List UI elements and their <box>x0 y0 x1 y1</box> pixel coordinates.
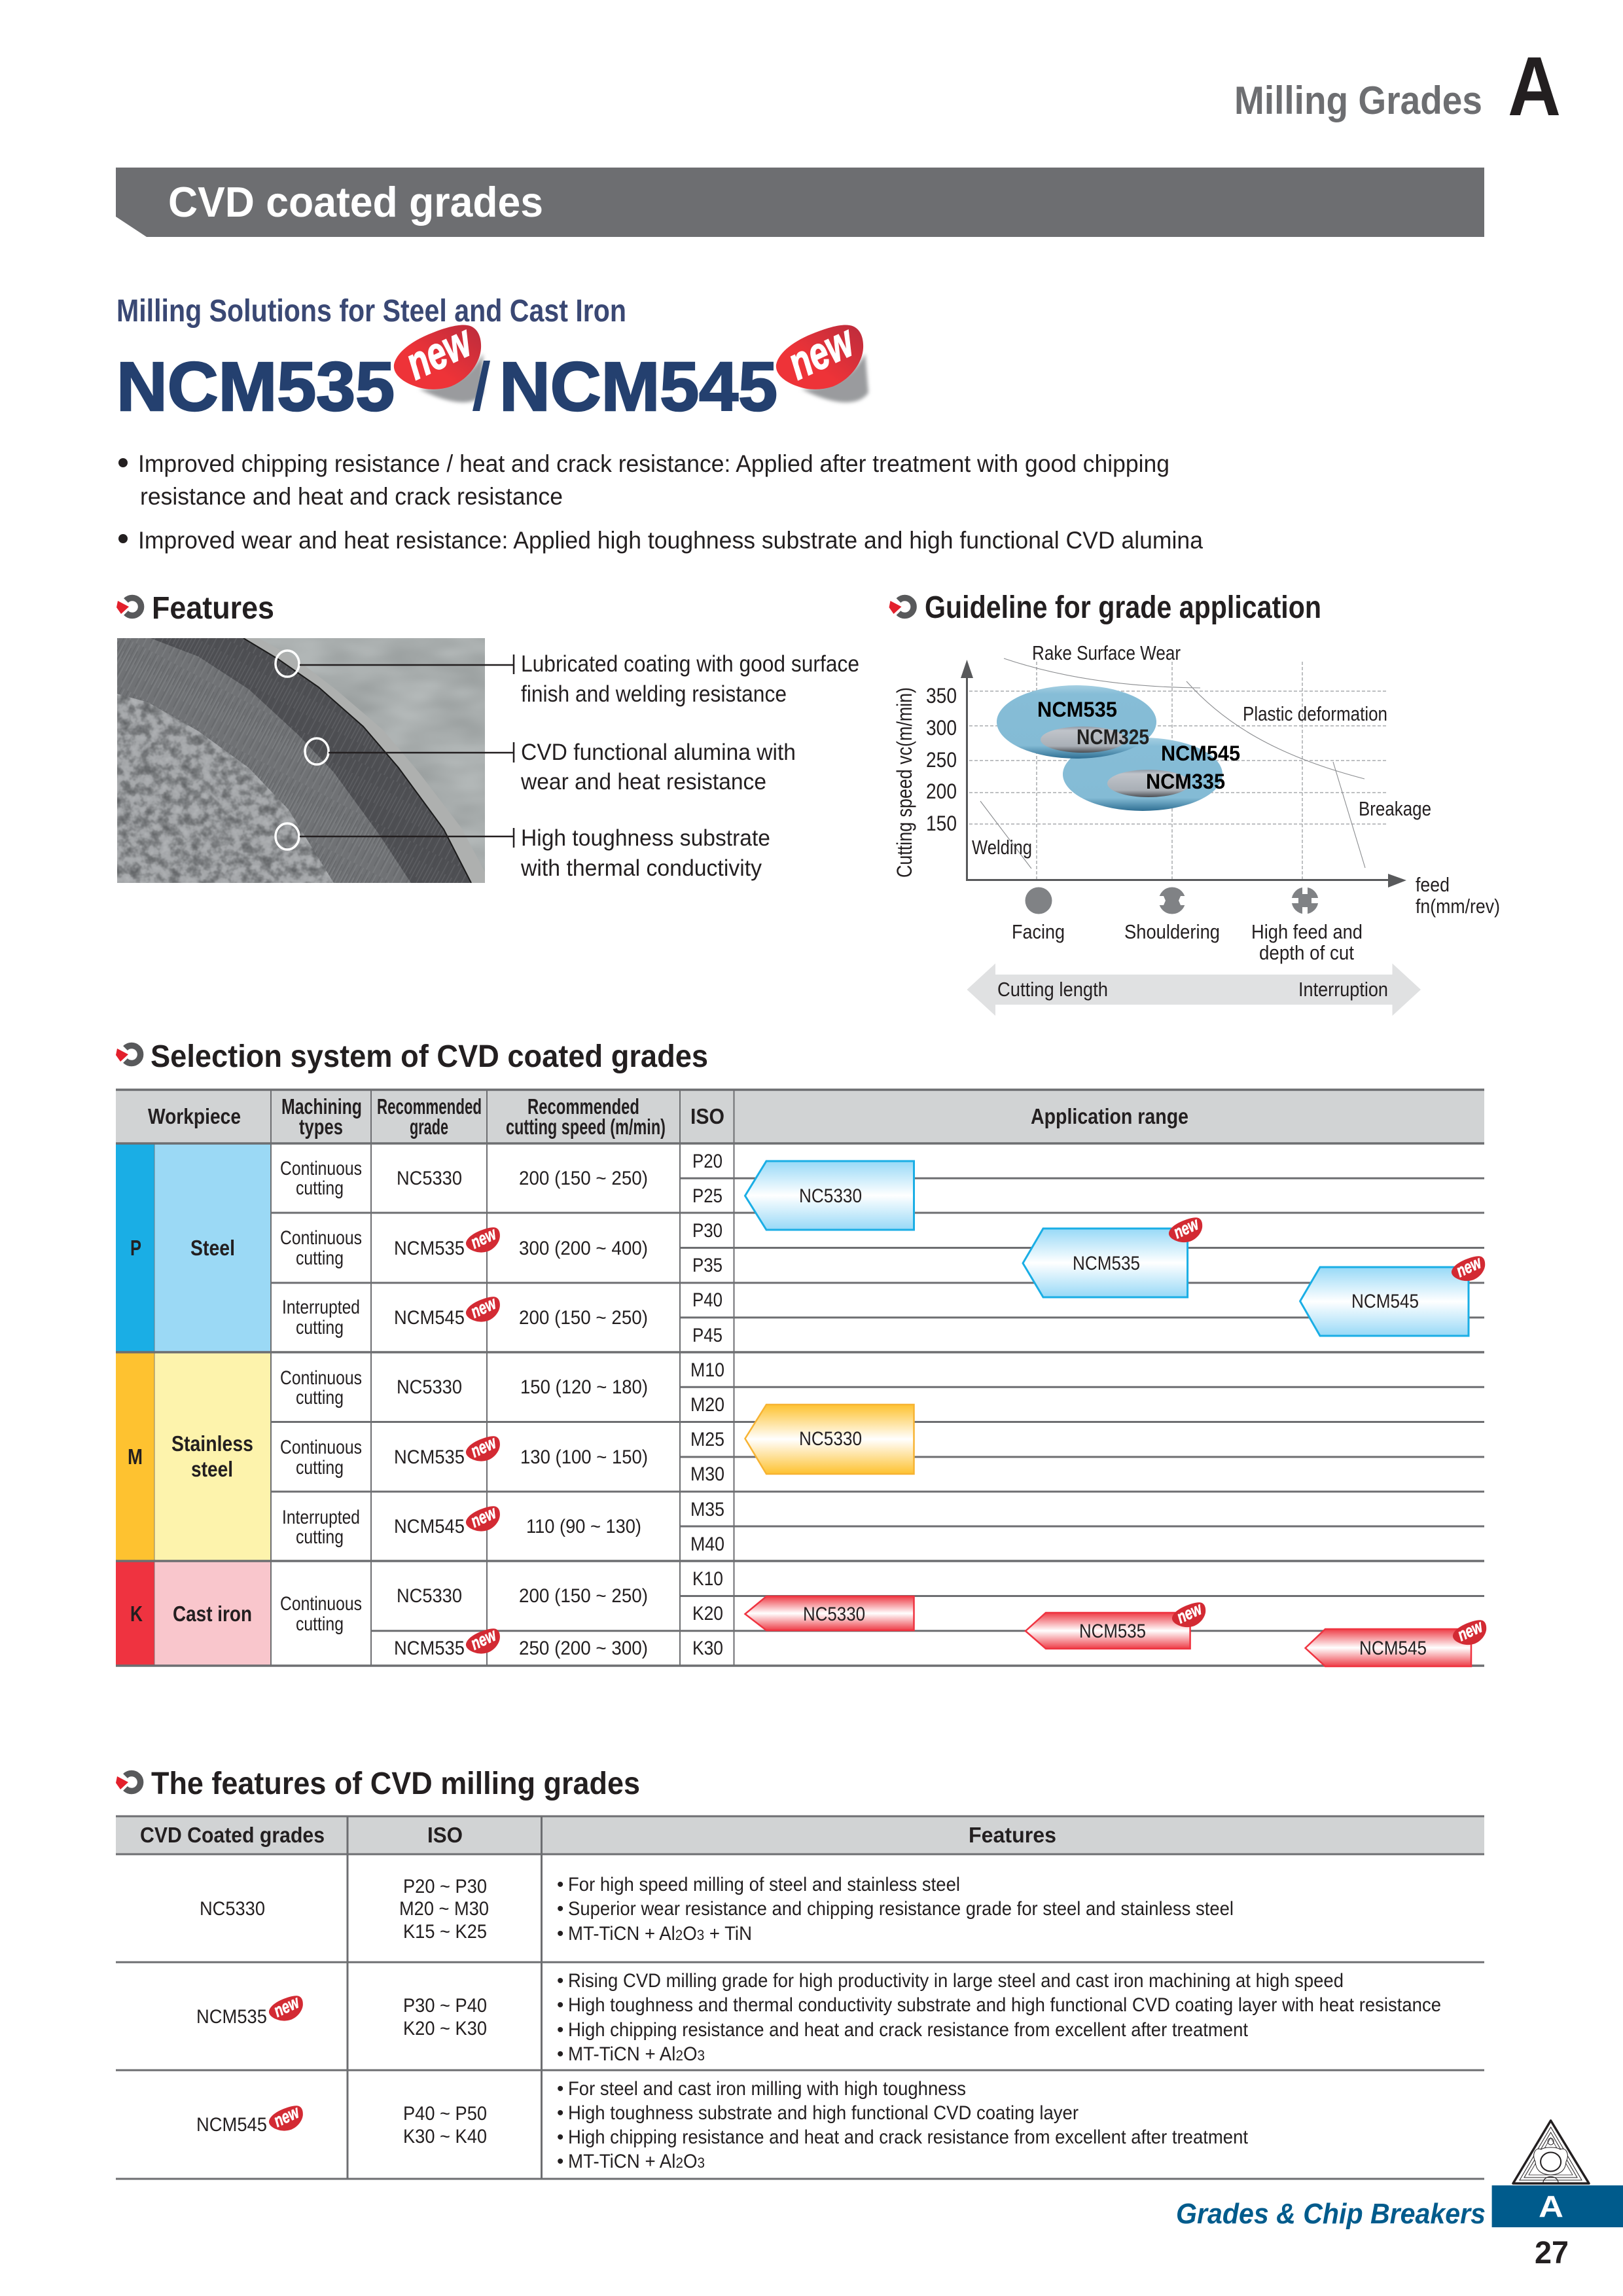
recommended grades: NC5330 <box>397 1376 462 1398</box>
icon: new badge: new <box>398 314 481 389</box>
workpiece group M: Stainless steel <box>116 1352 271 1561</box>
chart: guideline for grade application: fn(mm/rev) <box>1416 895 1500 918</box>
panel: coating cross-section micrograph <box>117 638 491 883</box>
machining type labels: cutting <box>296 1387 344 1408</box>
row: NCM535: High toughness and thermal conductivity substrate and high functional CVD coating layer with heat resistance <box>568 1994 1441 2016</box>
application range arrow: NCM535 K: new <box>1173 1598 1205 1627</box>
row: NC5330: NC5330 <box>200 1898 265 1920</box>
row: NC5330: P20 ~ P30 <box>403 1876 487 1897</box>
section heading: Selection system: Selection system of CVD coated grades <box>151 1039 708 1074</box>
chart: guideline for grade application: Plastic deformation <box>1243 702 1387 725</box>
table header row: cutting speed (m/min) <box>506 1115 666 1139</box>
row: NC5330: For high speed milling of steel and stainless steel <box>568 1874 960 1895</box>
recommended cutting speeds <box>519 1168 648 1659</box>
row: NCM545: High chipping resistance and heat and crack resistance from excellent after treatment <box>568 2126 1248 2148</box>
application range arrow: NCM535 K <box>1026 1598 1205 1649</box>
machining type labels: cutting <box>296 1177 344 1199</box>
chart: guideline for grade application: feed <box>1416 873 1450 896</box>
machining type labels: Continuous <box>280 1593 362 1615</box>
row: NCM545: K30 ~ K40 <box>403 2126 487 2147</box>
row: NCM535: High chipping resistance and heat and crack resistance from excellent after treatment <box>568 2019 1248 2041</box>
chart: guideline for grade application: Cutting speed vc(m/min) <box>893 687 916 878</box>
workpiece group K: Cast iron <box>116 1561 271 1666</box>
machining type labels: cutting <box>296 1317 344 1338</box>
callouts on the micrograph: finish and welding resistance <box>521 681 787 707</box>
table header row: types <box>299 1115 343 1139</box>
recommended grades: NCM545 <box>394 1307 465 1329</box>
icon: triangular insert <box>1513 2121 1589 2184</box>
intro bullet list: Improved chipping resistance / heat and crack resistance: Applied after treatment with good chipping <box>138 450 1169 477</box>
chart: guideline for grade application: 300 <box>926 716 957 740</box>
ellipse: NCM545 range <box>1063 738 1222 811</box>
chapter letter A: A <box>1508 40 1561 134</box>
table header row: Recommended <box>527 1094 639 1119</box>
recommended grades: NC5330 <box>397 1585 462 1607</box>
machining type labels <box>280 1158 362 1635</box>
table header row: ISO <box>690 1104 724 1128</box>
application range arrow: NCM545 K: new <box>1454 1616 1486 1645</box>
ellipse: NCM535 range <box>997 685 1156 759</box>
workpiece group M: Stainless steel: Stainless <box>171 1431 253 1456</box>
recommended cutting speeds: 200 (150 ~ 250) <box>519 1168 648 1189</box>
features table header: CVD Coated grades <box>140 1823 325 1847</box>
application range arrow: NCM535 P: NCM535 <box>1073 1253 1140 1274</box>
row: NCM535: • <box>557 2043 563 2065</box>
ISO codes: P40 <box>692 1289 722 1311</box>
recommended cutting speeds: 300 (200 ~ 400) <box>519 1238 648 1259</box>
application range arrow: NC5330 K: NC5330 <box>803 1604 865 1625</box>
table header row: Machining <box>281 1094 362 1119</box>
machining type labels: Continuous <box>280 1227 362 1249</box>
recommended cutting speeds: 250 (200 ~ 300) <box>519 1638 648 1659</box>
arrow: cutting length to interruption: Cutting length <box>997 978 1108 1001</box>
new badges in grade column: new <box>467 1624 500 1654</box>
application range arrow: NCM545 P: new <box>1453 1252 1485 1281</box>
callouts on the micrograph: Lubricated coating with good surface <box>521 651 859 677</box>
callouts on the micrograph: wear and heat resistance <box>520 769 766 795</box>
chart: guideline for grade application: Shouldering <box>1124 920 1220 943</box>
section heading: Guideline: Guideline for grade application <box>925 590 1321 625</box>
recommended grades: NCM535 <box>394 1238 465 1259</box>
ISO codes: K10 <box>692 1568 723 1590</box>
page number: 27 <box>1535 2236 1569 2270</box>
chart: guideline for grade application: Facing <box>1012 920 1065 943</box>
chart: guideline for grade application: Rake Surface Wear <box>1032 641 1181 664</box>
features table header: ISO <box>427 1823 463 1847</box>
row: NCM535: new <box>270 1992 303 2021</box>
product title with new badges <box>116 314 868 425</box>
recommended cutting speeds: 130 (100 ~ 150) <box>520 1446 648 1468</box>
application range arrow: NC5330 P: NC5330 <box>799 1185 862 1207</box>
row: NCM535: NCM535 <box>196 2006 267 2028</box>
application range arrow: NCM535 P: new <box>1170 1213 1202 1242</box>
row: NCM545: NCM545 <box>196 2114 267 2136</box>
features table header: Features <box>969 1823 1056 1847</box>
row: NCM535: • <box>557 2019 563 2041</box>
footer: section name: Grades & Chip Breakers <box>1176 2198 1486 2230</box>
ISO codes: P30 <box>692 1220 722 1242</box>
row: NC5330: • <box>557 1898 563 1920</box>
recommended grades: NCM545 <box>394 1516 465 1537</box>
ISO codes: M35 <box>690 1499 724 1520</box>
callouts on the micrograph <box>300 651 859 881</box>
ISO codes: K30 <box>692 1638 723 1659</box>
chart: guideline for grade application: 250 <box>926 748 957 772</box>
ISO codes: P45 <box>692 1325 722 1346</box>
chart: guideline for grade application: NCM535 <box>1037 698 1117 721</box>
application range arrow: NCM545 P <box>1300 1252 1485 1336</box>
application range arrow: NC5330 M <box>745 1405 914 1474</box>
recommended grades: NCM535 <box>394 1638 465 1659</box>
row: NCM545: • <box>557 2126 563 2148</box>
chart: guideline for grade application: Welding <box>972 836 1032 859</box>
section heading: The features of CVD milling grades: The features of CVD milling grades <box>151 1767 640 1801</box>
machining type labels: cutting <box>296 1247 344 1269</box>
ISO codes: P25 <box>692 1185 722 1207</box>
recommended grades: NCM535 <box>394 1446 465 1468</box>
workpiece group M: Stainless steel: M <box>128 1444 143 1469</box>
workpiece group P: Steel: P <box>130 1236 141 1260</box>
machining type labels: cutting <box>296 1457 344 1479</box>
icon: facing <box>1025 888 1052 914</box>
row: NCM545: new <box>270 2102 303 2131</box>
arrow: cutting length to interruption: Interruption <box>1298 978 1388 1001</box>
machining type labels: Interrupted <box>282 1507 360 1528</box>
ISO codes: M25 <box>690 1429 724 1450</box>
chart: guideline for grade application: Breakage <box>1359 797 1431 820</box>
table header row: Workpiece <box>148 1104 241 1128</box>
ISO codes: M10 <box>690 1359 724 1381</box>
workpiece group K: Cast iron: Cast iron <box>173 1602 252 1626</box>
application range arrow: NCM545 K: NCM545 <box>1359 1638 1427 1659</box>
intro bullet list <box>118 450 1203 554</box>
panel: selection table <box>116 1090 1486 1666</box>
table grid lines <box>116 1090 1484 1666</box>
panel: features table <box>116 1816 1484 2179</box>
row: NC5330 <box>200 1874 1234 1945</box>
row: NCM545: • <box>557 2102 563 2124</box>
ISO codes: K20 <box>692 1603 723 1624</box>
machining type labels: cutting <box>296 1613 344 1635</box>
title banner: CVD coated grades <box>168 178 543 226</box>
chart: guideline for grade application: 350 <box>926 684 957 708</box>
machining type labels: Continuous <box>280 1437 362 1458</box>
row: NCM535: Rising CVD milling grade for high productivity in large steel and cast iron machining at high speed <box>568 1970 1344 1992</box>
arrow: cutting length to interruption <box>967 963 1421 1016</box>
new badges in grade column: new <box>467 1432 500 1462</box>
row: NCM535: • <box>557 1970 563 1992</box>
ISO codes <box>690 1151 724 1659</box>
table header row <box>116 1090 1484 1143</box>
row: NCM545: • <box>557 2078 563 2100</box>
row: NCM545: For steel and cast iron milling with high toughness <box>568 2078 966 2100</box>
new badges in grade column: new <box>467 1502 500 1532</box>
recommended grades: NC5330 <box>397 1168 462 1189</box>
table header row: grade <box>410 1115 448 1139</box>
row: NC5330: • <box>557 1923 563 1945</box>
row: NC5330: • <box>557 1874 563 1895</box>
icon: high feed and depth of cut <box>1291 887 1319 914</box>
subtitle: Milling Solutions for Steel and Cast Iron <box>116 294 626 329</box>
icon: new badge <box>776 314 863 389</box>
product title with new badges: NCM545 <box>499 348 777 425</box>
footer: chapter tab: A <box>1539 2189 1563 2223</box>
recommended grades <box>394 1168 465 1659</box>
chart: guideline for grade application: depth of cut <box>1259 941 1354 964</box>
application range arrow: NCM535 P <box>1023 1213 1202 1297</box>
ISO codes: P35 <box>692 1255 722 1276</box>
machining type labels: cutting <box>296 1526 344 1548</box>
new badges in grade column: new <box>467 1293 500 1322</box>
row: NCM535 <box>196 1970 1441 2065</box>
table header row: Recommended <box>377 1094 482 1119</box>
row: NC5330: K15 ~ K25 <box>403 1921 487 1943</box>
icon: new badge: new <box>780 314 863 389</box>
application range arrow: NCM545 K <box>1306 1616 1486 1666</box>
chart: guideline for grade application: High feed and <box>1251 920 1363 943</box>
table header row: Application range <box>1031 1104 1188 1128</box>
ISO codes: M40 <box>690 1534 724 1555</box>
application range arrow: NC5330 K <box>745 1596 914 1630</box>
product title with new badges: NCM535 <box>116 348 395 425</box>
workpiece group P: Steel <box>116 1143 271 1352</box>
chart: guideline for grade application: NCM325 <box>1077 725 1149 749</box>
row: NC5330: MT-TiCN + Al2O3 + TiN <box>568 1923 752 1945</box>
footer: chapter tab <box>1492 2185 1623 2227</box>
ISO codes: M20 <box>690 1394 724 1416</box>
chart: guideline for grade application: 200 <box>926 780 957 803</box>
row: NCM545: MT-TiCN + Al2O3 <box>568 2151 705 2172</box>
workpiece group P: Steel: Steel <box>190 1236 235 1260</box>
chart: guideline for grade application: 150 <box>926 812 957 835</box>
row: NC5330: Superior wear resistance and chipping resistance grade for steel and stainless steel <box>568 1898 1234 1920</box>
chart: guideline for grade application <box>893 641 1500 964</box>
row: NCM545: High toughness substrate and high functional CVD coating layer <box>568 2102 1079 2124</box>
ISO codes: M30 <box>690 1463 724 1485</box>
new badges in grade column <box>466 1223 500 1654</box>
callouts on the micrograph: with thermal conductivity <box>520 855 762 881</box>
row: NC5330: M20 ~ M30 <box>399 1898 489 1920</box>
icon: shouldering <box>1158 888 1186 914</box>
ISO codes: P20 <box>692 1151 722 1172</box>
application range arrow: NCM535 K: NCM535 <box>1079 1621 1146 1642</box>
application range arrow: NC5330 P <box>745 1161 914 1230</box>
intro bullet list: Improved wear and heat resistance: Applied high toughness substrate and high functional CVD alumina <box>138 527 1203 554</box>
row: NCM535: • <box>557 1994 563 2016</box>
chart: guideline for grade application: NCM335 <box>1146 770 1225 793</box>
row: NCM535: K20 ~ K30 <box>403 2018 487 2039</box>
icon: new badge <box>394 314 481 389</box>
callouts on the micrograph: High toughness substrate <box>521 825 770 851</box>
row: NCM545: P40 ~ P50 <box>403 2103 487 2125</box>
chart: guideline for grade application: NCM545 <box>1161 742 1240 765</box>
section heading: Features: Features <box>152 591 274 626</box>
features table header <box>116 1816 1484 1854</box>
features table grid lines <box>116 1816 1484 2179</box>
recommended cutting speeds: 110 (90 ~ 130) <box>526 1516 641 1537</box>
recommended cutting speeds: 200 (150 ~ 250) <box>519 1307 648 1329</box>
row: NCM535: P30 ~ P40 <box>403 1995 487 2017</box>
machining type labels: Continuous <box>280 1158 362 1179</box>
new badges in grade column: new <box>467 1223 500 1253</box>
intro bullet list: resistance and heat and crack resistance <box>140 483 563 510</box>
workpiece group M: Stainless steel: steel <box>191 1457 233 1481</box>
machining type labels: Continuous <box>280 1367 362 1389</box>
recommended cutting speeds: 150 (120 ~ 180) <box>520 1376 648 1398</box>
title banner <box>116 168 1484 237</box>
row: NCM535: MT-TiCN + Al2O3 <box>568 2043 705 2065</box>
workpiece group K: Cast iron: K <box>130 1602 143 1626</box>
recommended cutting speeds: 200 (150 ~ 250) <box>519 1585 648 1607</box>
application range arrow: NC5330 M: NC5330 <box>799 1428 862 1450</box>
row: NCM545 <box>196 2078 1248 2172</box>
machining type labels: Interrupted <box>282 1297 360 1318</box>
page header: Milling Grades: Milling Grades <box>1234 79 1482 122</box>
application range arrow: NCM545 P: NCM545 <box>1351 1291 1419 1312</box>
row: NCM545: • <box>557 2151 563 2172</box>
callouts on the micrograph: CVD functional alumina with <box>521 740 796 765</box>
